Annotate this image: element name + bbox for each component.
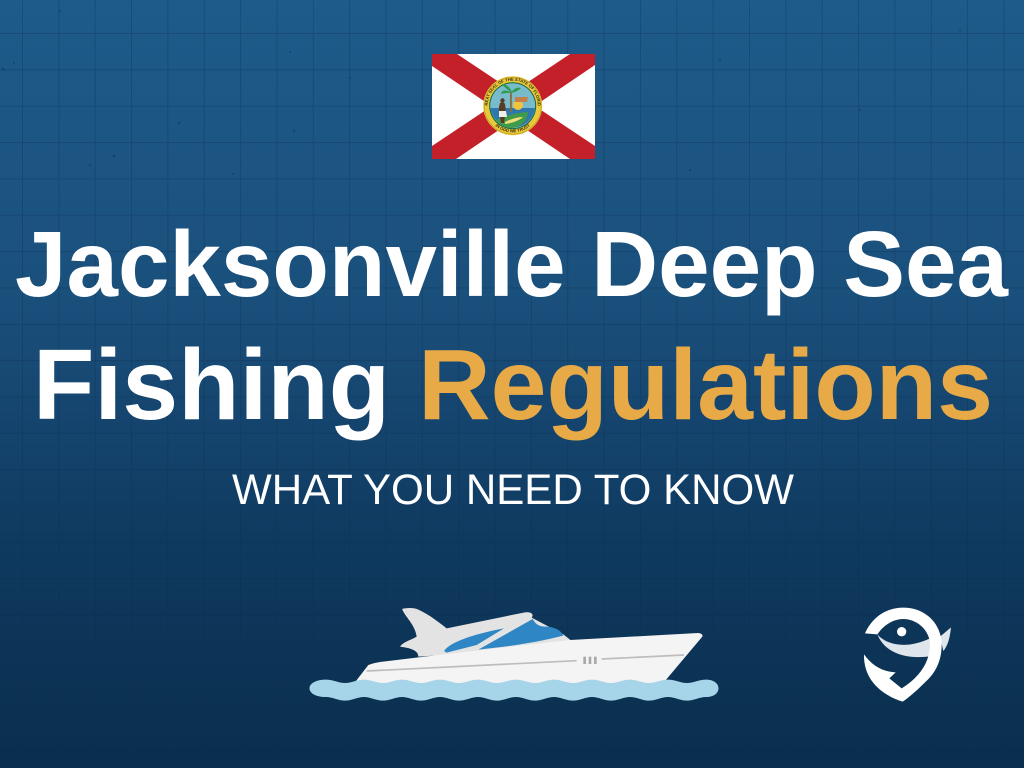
yacht hull <box>356 633 702 692</box>
icon: yacht on water <box>309 608 718 701</box>
state seal: IN GOD WE TRUST <box>495 124 530 132</box>
red saltire <box>432 54 595 159</box>
logo eye <box>897 627 906 636</box>
yacht cabin <box>400 608 572 657</box>
title line 1: Jacksonville Deep Sea <box>15 212 1010 316</box>
hull stripe and vents <box>367 655 684 671</box>
icon: fish logo <box>864 608 951 702</box>
logo band and tail <box>877 627 951 657</box>
logo body <box>864 608 942 702</box>
state seal <box>483 76 542 136</box>
title line 2: Fishing Regulations <box>33 329 993 441</box>
subtitle: WHAT YOU NEED TO KNOW <box>232 466 794 514</box>
yacht windows <box>444 619 563 653</box>
flag of Florida <box>432 54 595 159</box>
water <box>309 680 718 701</box>
